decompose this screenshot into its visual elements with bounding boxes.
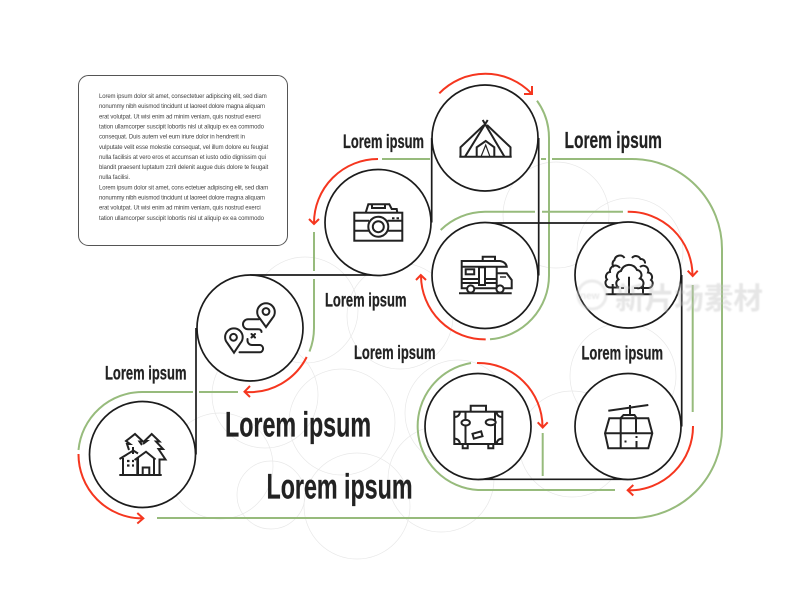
text panel — [78, 76, 288, 246]
text panel: Lorem ipsum dolor sit amet, cons ectetuer adipiscing elit, sed diam — [99, 185, 268, 191]
node: route map — [197, 275, 303, 381]
text panel: tation ullamcorper suscipit lobortis nisl ut aliquip ex ea commodo — [99, 216, 265, 222]
text panel: nonummy nibh euismod tincidunt ut laoreet dolore magna aliquam — [99, 104, 265, 110]
node: camera — [325, 170, 431, 276]
red arrows — [78, 74, 698, 523]
label: cable car: Lorem ipsum — [582, 344, 663, 364]
icon: cable car — [605, 405, 652, 448]
large heading: second: Lorem ipsum — [266, 468, 412, 506]
node: tent — [432, 85, 538, 191]
large heading: first: Lorem ipsum — [225, 406, 371, 444]
text panel: consequat. Duis autem vel eum iriure dolor in hendrerit in — [99, 135, 245, 141]
icon: suitcase — [454, 406, 502, 448]
label: tent: Lorem ipsum — [343, 132, 424, 153]
node: camper van — [432, 222, 538, 328]
text panel: erat volutpat. Ut wisi enim ad minim veniam, quis nostrud exerci — [99, 114, 261, 120]
text panel: nulla facilisi. — [99, 175, 130, 181]
icon: trees — [605, 256, 653, 294]
black connector lines — [196, 138, 682, 479]
text panel: nonummy nibh euismod tincidunt ut laoreet dolore magna aliquam — [99, 196, 265, 202]
label: cabin: Lorem ipsum — [105, 364, 186, 384]
node: trees — [575, 222, 681, 328]
text panel: blandit praesent luptatum zzril delenit augue duis dolore te feugait — [99, 165, 269, 171]
label: camper van: Lorem ipsum — [354, 343, 436, 364]
text panel: tation ullamcorper suscipit lobortis nisl ut aliquip ex ea commodo — [99, 124, 265, 130]
text panel: nulla facilisis at vero eros et accumsan et iusto odio dignissim qui — [99, 155, 266, 161]
text panel: vulputate velit esse molestie consequat, vel illum dolore eu feugiat — [99, 145, 269, 151]
label: top right: Lorem ipsum — [564, 127, 662, 153]
icon: camper van — [459, 257, 512, 293]
icon: map route with pins — [225, 303, 275, 353]
text panel: erat volutpat. Ut wisi enim ad minim veniam, quis nostrud exerci — [99, 206, 261, 212]
icon: tent — [459, 120, 512, 157]
node: suitcase — [425, 374, 531, 480]
text panel: Lorem ipsum dolor sit amet, consectetuer adipiscing elit, sed diam — [99, 94, 267, 100]
node: cabin — [90, 402, 196, 508]
green route lines — [78, 101, 722, 518]
icon: cabin in the woods — [119, 434, 166, 475]
watermark: 新片场素材 — [615, 283, 763, 316]
icon: camera — [354, 204, 402, 241]
watermark: new — [580, 291, 600, 302]
node: cable car — [575, 374, 681, 480]
label: camera: Lorem ipsum — [325, 290, 406, 312]
